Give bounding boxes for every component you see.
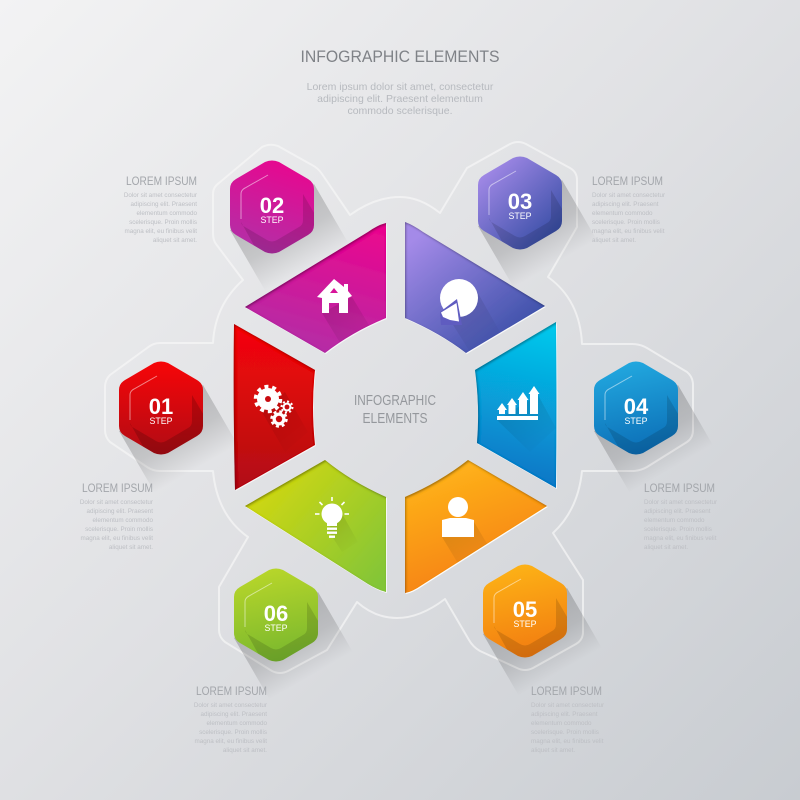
text block: step 06: Dolor sit amet consectetur [194,702,267,709]
text block: step 01: scelerisque. Proin mollis [85,526,153,533]
step 05 badge: STEP [514,619,536,630]
text block: step 01 [80,481,153,551]
panel: segment 06 green bulb [245,460,387,593]
text block: step 06 [194,684,267,754]
text block: step 05: magna elit, eu finibus velit [531,738,604,745]
text block: step 06: elementum commodo [206,720,267,727]
text block: step 06: LOREM IPSUM [196,684,267,698]
icon: pie chart [440,279,478,325]
text block: step 04: magna elit, eu finibus velit [644,535,717,542]
text block: step 01: LOREM IPSUM [82,481,153,495]
step 02 badge [230,160,344,284]
text block: step 02: magna elit, eu finibus velit [125,228,197,235]
text block: step 01: magna elit, eu finibus velit [81,535,153,542]
step 03 badge: 03 [508,189,532,214]
text block: step 05: aliquet sit amet. [531,747,575,754]
text block: step 06: aliquet sit amet. [223,747,267,754]
subtitle text: Lorem ipsum dolor sit amet, consectetur [307,81,494,93]
step 04 badge: 04 [624,394,649,419]
center label: INFOGRAPHIC [354,393,436,409]
text block: step 04: adipiscing elit. Praesent [644,508,711,515]
text block: step 05: scelerisque. Proin mollis [531,729,599,736]
text block: step 04: scelerisque. Proin mollis [644,526,712,533]
step 02 badge: 02 [260,193,284,218]
icon: light bulb [315,497,349,538]
step 04 badge [594,362,708,484]
text block: step 01: Dolor sit amet consectetur [80,499,153,506]
step 03 badge [478,156,592,279]
text block: step 02: adipiscing elit. Praesent [130,201,197,208]
text block: step 04: LOREM IPSUM [644,481,715,495]
text block: step 06: magna elit, eu finibus velit [195,738,267,745]
center label: ELEMENTS [362,411,428,427]
text block: step 03: scelerisque. Proin mollis [592,219,660,226]
text block: step 05: LOREM IPSUM [531,684,602,698]
step 01 badge: STEP [150,416,172,427]
text block: step 03: magna elit, eu finibus velit [592,228,665,235]
panel: segment 05 orange person [405,460,548,594]
text block: step 01: elementum commodo [92,517,153,524]
icon: rising arrows chart [497,386,540,420]
text block: step 06: adipiscing elit. Praesent [200,711,267,718]
text block: step 04: Dolor sit amet consectetur [644,499,717,506]
text block: step 03: adipiscing elit. Praesent [592,201,659,208]
subtitle text [307,81,494,117]
subtitle text: adipiscing elit. Praesent elementum [317,93,483,105]
text block: step 02 [124,174,197,244]
panel: segment 04 blue chart [475,322,557,489]
step 01 badge: 01 [149,394,173,419]
text block: step 01: adipiscing elit. Praesent [86,508,153,515]
panel: segment 03 purple pie [405,222,546,354]
text block: step 01: aliquet sit amet. [109,544,153,551]
step 04 badge: STEP [624,416,648,427]
text block: step 02: elementum commodo [136,210,197,217]
outline: gear shaped contour [105,142,693,673]
text block: step 03: LOREM IPSUM [592,174,663,188]
step 05 badge: 05 [513,597,537,622]
text block: step 02: LOREM IPSUM [126,174,197,188]
text block: step 04 [644,481,717,551]
text block: step 04: aliquet sit amet. [644,544,688,551]
center label [354,393,436,427]
text block: step 03: Dolor sit amet consectetur [592,192,665,199]
text block: step 02: aliquet sit amet. [153,237,197,244]
subtitle text: commodo scelerisque. [347,105,453,117]
icon: person [442,497,474,537]
text block: step 06: scelerisque. Proin mollis [199,729,267,736]
icon: house [317,279,352,313]
text block: step 02: scelerisque. Proin mollis [129,219,197,226]
text block: step 05: elementum commodo [531,720,592,727]
step 01 badge [119,362,233,484]
text block: step 04: elementum commodo [644,517,705,524]
icon: gears [256,386,292,426]
panel: segment 02 magenta home [245,223,387,356]
step 06 badge [234,568,348,690]
title: INFOGRAPHIC ELEMENTS [300,47,500,66]
text block: step 02: Dolor sit amet consectetur [124,192,197,199]
step 05 badge [483,564,596,687]
text block: step 03: aliquet sit amet. [592,237,636,244]
panel: segment 01 red gears [234,324,316,491]
text block: step 05: adipiscing elit. Praesent [531,711,598,718]
text block: step 03 [592,174,665,244]
step 03 badge: STEP [508,211,532,222]
step 06 badge: 06 [264,601,288,626]
text block: step 05 [531,684,604,754]
step 02 badge: STEP [260,215,284,226]
step 06 badge: STEP [264,623,288,634]
text block: step 05: Dolor sit amet consectetur [531,702,604,709]
text block: step 03: elementum commodo [592,210,653,217]
